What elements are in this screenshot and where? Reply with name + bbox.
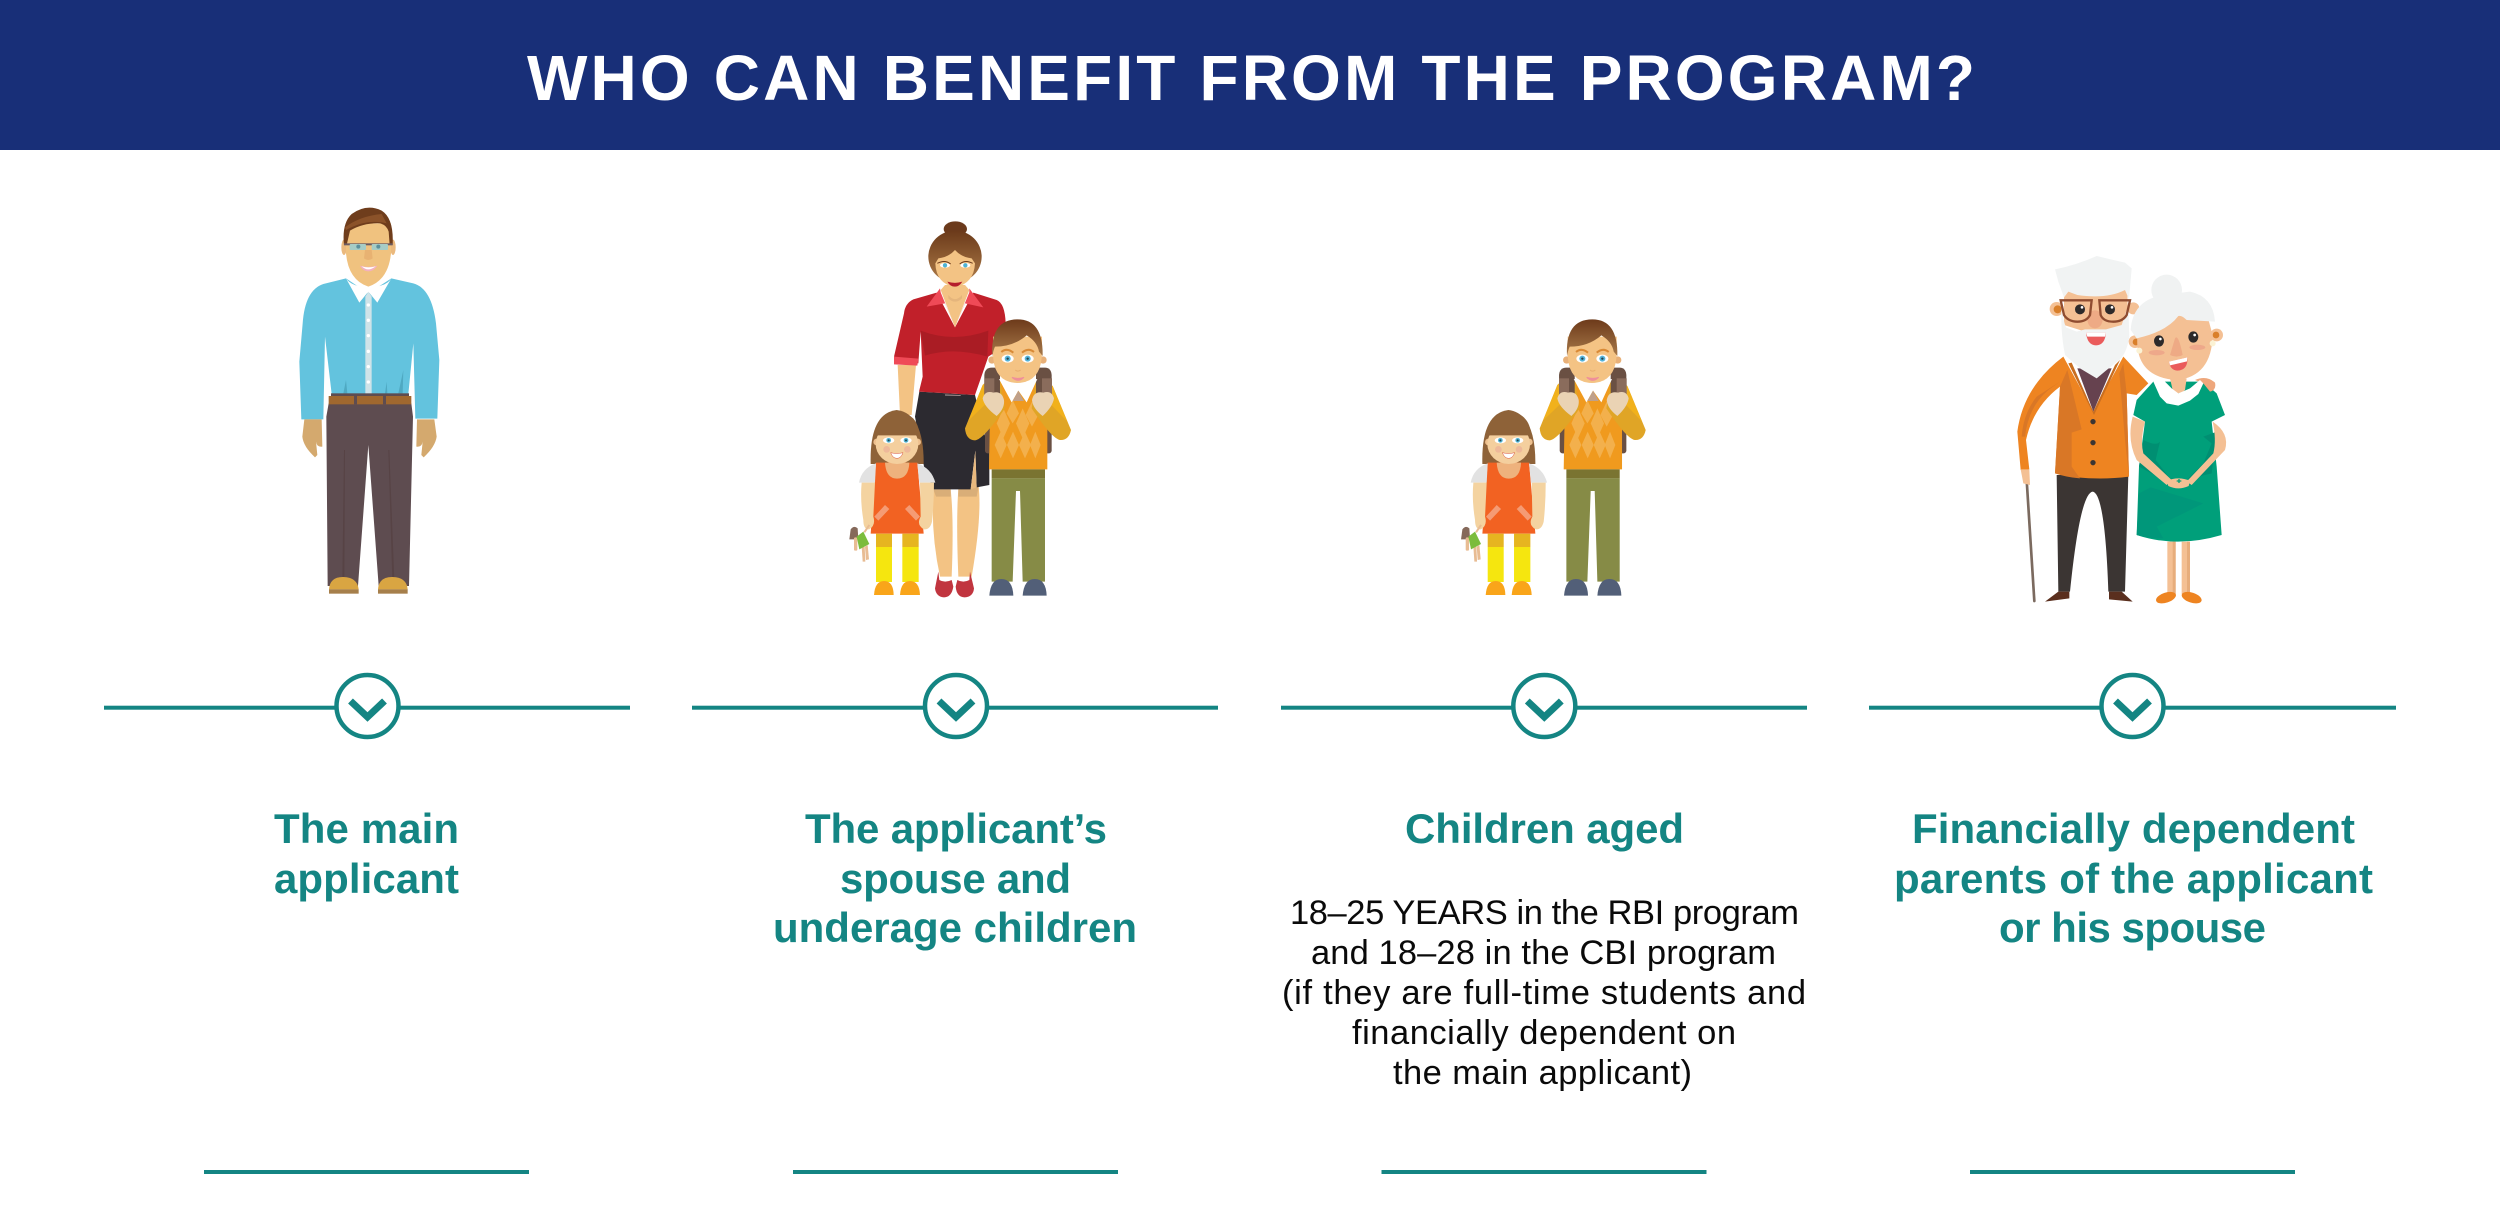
icon: mother with son and daughter [849, 221, 1071, 597]
heading [1894, 805, 2373, 951]
divider with chevron [1869, 675, 2396, 737]
heading: parents of the applicant [1894, 855, 2373, 902]
panel: financially dependent parents [1869, 256, 2396, 1174]
heading: The main [274, 805, 459, 852]
body text [1282, 894, 1806, 1092]
bottom rule [1970, 1170, 2295, 1174]
icon: elderly couple [2017, 256, 2226, 606]
panel: children aged 18-25 or 18-28 [1281, 319, 1807, 1174]
panel: spouse and underage children [692, 221, 1218, 1174]
bottom rule [1382, 1170, 1706, 1174]
body text: the main applicant) [1393, 1054, 1692, 1092]
body text: and 18–28 in the CBI program [1311, 934, 1776, 972]
divider with chevron [692, 675, 1218, 737]
panel: the main applicant [104, 208, 630, 1174]
heading [773, 805, 1137, 951]
icon: son and daughter [1461, 319, 1646, 596]
divider with chevron [104, 675, 630, 737]
heading: underage children [773, 904, 1137, 951]
heading: Financially dependent [1912, 805, 2355, 852]
bottom rule [793, 1170, 1118, 1174]
header bar [0, 0, 2500, 150]
title: WHO CAN BENEFIT FROM THE PROGRAM? [527, 42, 1975, 114]
heading: applicant [274, 855, 459, 902]
divider with chevron [1281, 675, 1807, 737]
body text: (if they are full-time students and [1282, 974, 1806, 1012]
heading: The applicant’s [805, 805, 1107, 852]
heading: or his spouse [1999, 904, 2266, 951]
icon: man in blue shirt [299, 208, 439, 594]
body text: financially dependent on [1352, 1014, 1736, 1052]
bottom rule [204, 1170, 529, 1174]
heading: Children aged [1405, 805, 1684, 852]
body text: 18–25 YEARS in the RBI program [1290, 894, 1799, 932]
heading: spouse and [840, 855, 1071, 902]
heading [274, 805, 459, 902]
